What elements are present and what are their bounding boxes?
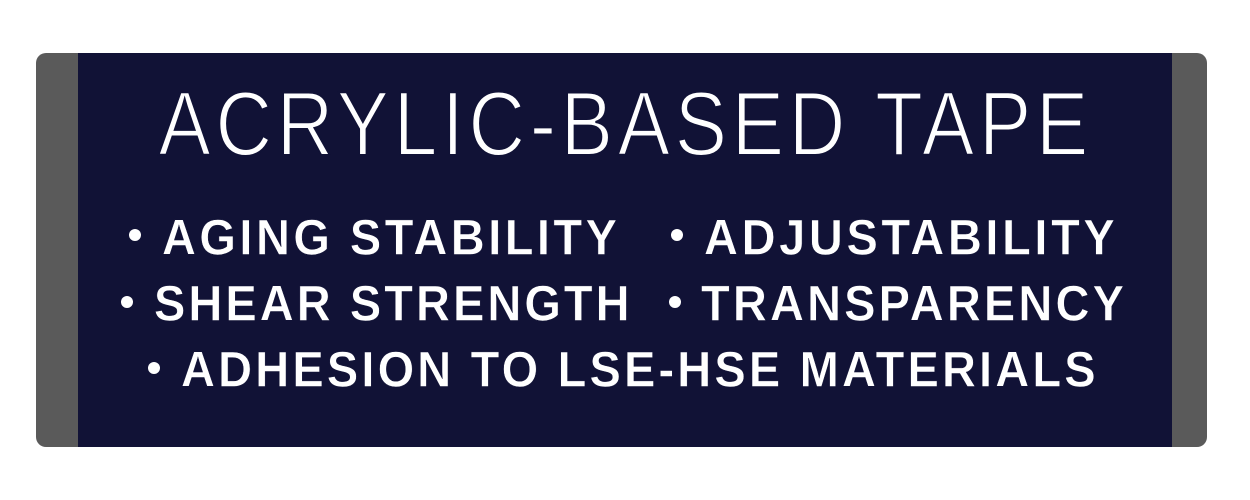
panel: navy centre xyxy=(78,53,1172,447)
bullet: transparency: TRANSPARENCY xyxy=(701,276,1124,332)
bullet: aging stability: AGING STABILITY xyxy=(162,210,617,266)
bullet: adjustability: ADJUSTABILITY xyxy=(704,210,1115,266)
panel: tape roll sides xyxy=(36,53,1207,447)
bullet: shear strength: SHEAR STRENGTH xyxy=(154,276,630,332)
bullet: adhesion to LSE-HSE materials: ADHESION TO LSE-HSE MATERIALS xyxy=(181,342,1096,398)
title: ACRYLIC-BASED TAPE xyxy=(158,72,1088,174)
